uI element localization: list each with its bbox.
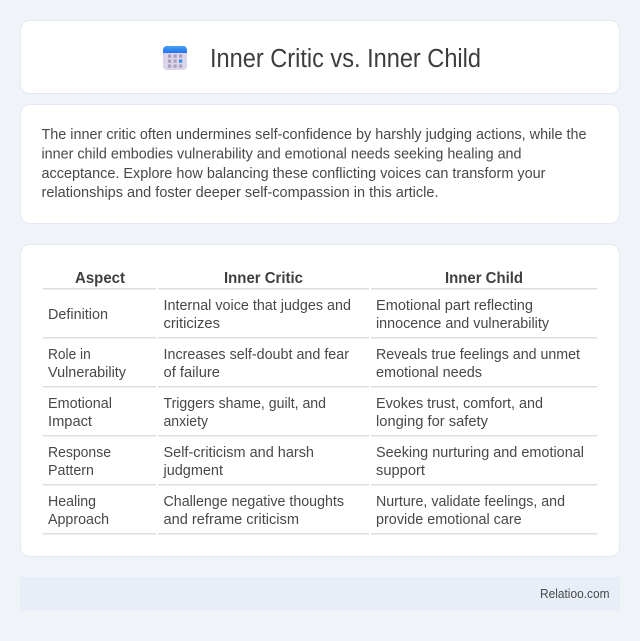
row: emotional impact: Evokes trust, comfort, and [376,396,543,412]
row: emotional impact: longing for safety [376,414,489,430]
intro text: inner child embodies vulnerability and emotional needs seeking healing and [42,146,522,162]
row: role in vulnerability: Increases self-doubt and fear [164,347,349,363]
row: response pattern: Response [48,445,111,461]
row: definition: criticizes [164,316,220,332]
row: response pattern: judgment [163,463,223,479]
footer: Relatioo.com [540,586,610,601]
intro text: relationships and foster deeper self-compassion in this article. [42,185,438,201]
row: healing approach: and reframe criticism [164,512,299,528]
row: emotional impact: anxiety [164,414,209,430]
intro text [42,127,586,201]
panel: comparison table card [20,244,620,556]
row: response pattern: Pattern [48,463,94,479]
row: role in vulnerability: Role in [48,347,91,363]
intro text: The inner critic often undermines self-confidence by harshly judging actions, while the [42,127,586,143]
row: healing approach [48,494,565,528]
row: healing approach: Approach [48,512,109,528]
row: emotional impact: Impact [48,414,92,430]
row: role in vulnerability: Reveals true feelings and unmet [376,347,580,363]
row: role in vulnerability [48,347,580,381]
intro text: acceptance. Explore how balancing these conflicting voices can transform your [42,166,546,182]
row: role in vulnerability: of failure [164,365,220,381]
table header row: Inner Child [445,270,523,287]
row: healing approach: Challenge negative thoughts [164,494,344,510]
title: Inner Critic vs. Inner Child [210,45,481,73]
table header row: Inner Critic [224,270,303,287]
row: emotional impact: Emotional [48,396,112,412]
footer [20,577,620,611]
row: emotional impact [48,396,543,430]
row: definition: innocence and vulnerability [376,316,550,332]
table header row: Aspect [75,270,125,287]
row: role in vulnerability: Vulnerability [48,365,127,381]
row: response pattern [48,445,584,479]
row: response pattern: Seeking nurturing and emotional [376,445,584,461]
row: emotional impact: Triggers shame, guilt, and [164,396,326,412]
row: definition: Internal voice that judges and [164,298,351,314]
icon: calendar [163,46,187,70]
row: response pattern: support [376,463,425,479]
row: definition [48,298,550,332]
row: response pattern: Self-criticism and harsh [164,445,314,461]
row: role in vulnerability: emotional needs [376,365,482,381]
row: definition: Definition [48,307,108,323]
row: healing approach: provide emotional care [376,512,522,528]
row: healing approach: Healing [48,494,96,510]
panel: intro card [20,104,620,224]
row: healing approach: Nurture, validate feelings, and [376,494,565,510]
table header row [75,270,523,287]
row: definition: Emotional part reflecting [376,298,533,314]
panel: title card [20,20,620,94]
